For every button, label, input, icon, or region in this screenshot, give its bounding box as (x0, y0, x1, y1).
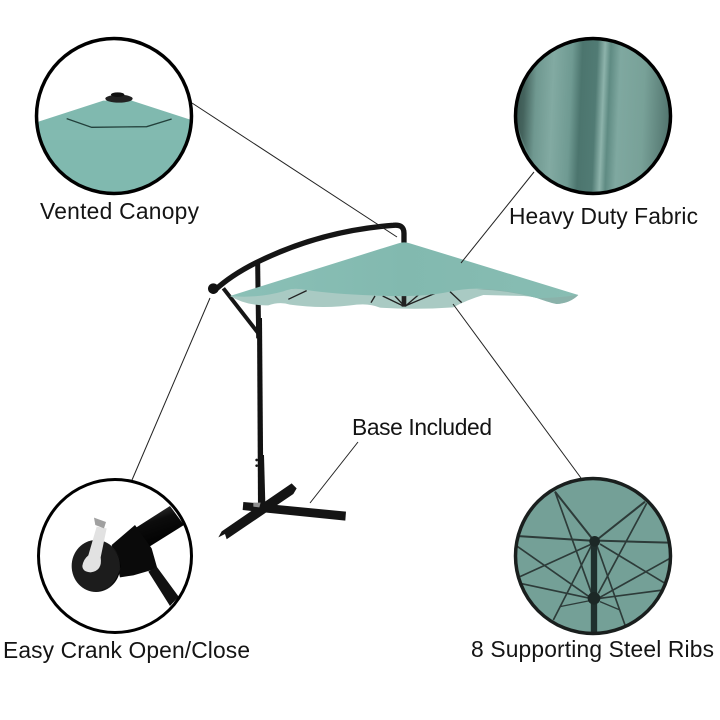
leader line: easy crank (132, 298, 210, 480)
label: Heavy Duty Fabric: Heavy Duty Fabric (509, 203, 698, 229)
label: Vented Canopy: Vented Canopy (40, 198, 200, 224)
vented canopy ring (36, 38, 192, 194)
ribs photo (517, 480, 669, 632)
label: 8 Supporting Steel Ribs: 8 Supporting Steel Ribs (471, 636, 714, 662)
underside ribs (288, 291, 462, 307)
panel: vented canopy (33, 38, 200, 224)
canopy underside (230, 277, 578, 309)
fabric photo (517, 40, 669, 192)
crank ring (38, 480, 192, 632)
vented canopy photo (38, 92, 190, 192)
crank knob (208, 283, 219, 294)
leader line: steel ribs (453, 304, 581, 478)
ribs ring (516, 478, 670, 634)
strut (223, 288, 258, 333)
leader line: vented canopy (192, 103, 397, 237)
leader line: heavy duty fabric (461, 172, 534, 263)
label: Easy Crank Open/Close: Easy Crank Open/Close (3, 637, 250, 663)
label: Base Included: Base Included (352, 414, 492, 440)
vertical support (250, 263, 266, 338)
fabric ring (516, 38, 670, 194)
umbrella (208, 225, 578, 539)
crank photo (72, 506, 184, 606)
arm and canopy (208, 225, 578, 338)
panel: steel ribs (471, 470, 714, 662)
panel: easy crank (3, 480, 250, 663)
pole (257, 318, 264, 510)
leader line: base (310, 442, 358, 503)
base cross (218, 455, 346, 539)
canopy top (230, 242, 578, 298)
curved arm (215, 225, 404, 290)
panel: heavy duty fabric (509, 35, 698, 229)
